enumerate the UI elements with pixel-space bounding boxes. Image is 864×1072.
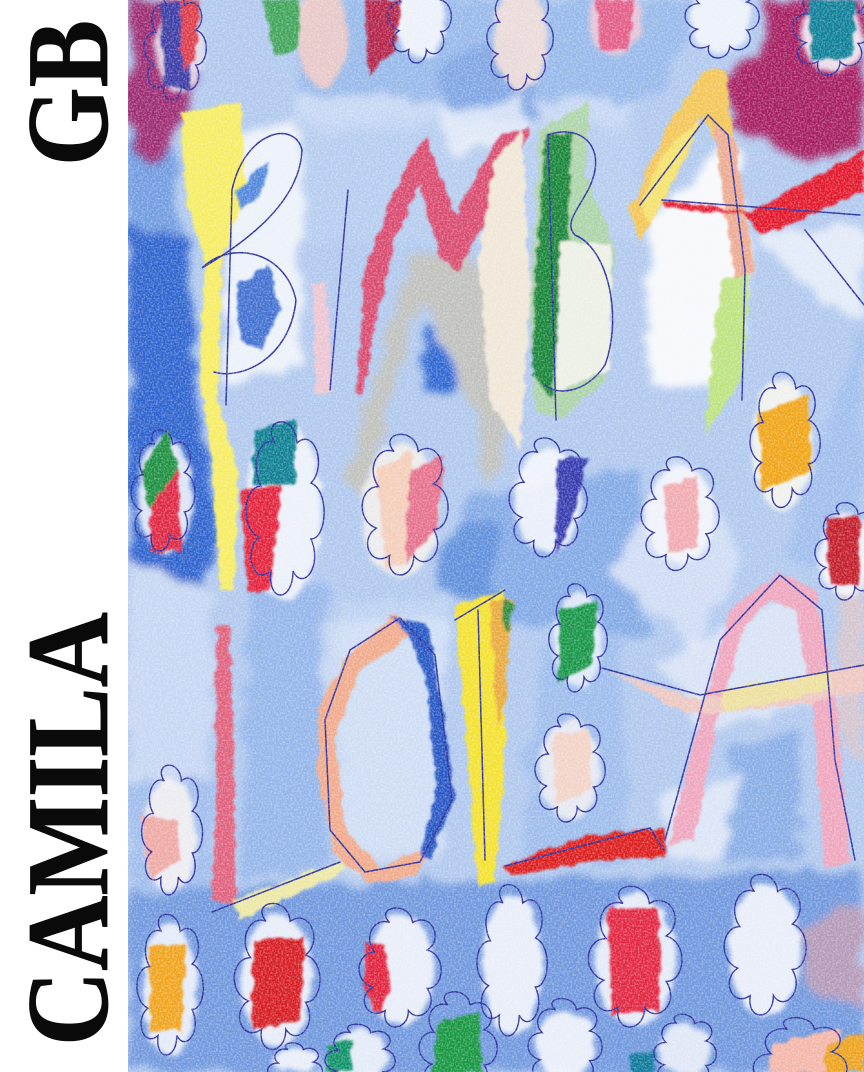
- letter I outline: [330, 190, 348, 390]
- vertical name: GB: GB: [4, 20, 133, 166]
- letter O: [315, 612, 428, 885]
- A strokes: [630, 70, 755, 280]
- thin pink strokes: [312, 280, 332, 395]
- lower A outline: [602, 575, 864, 860]
- blue pencil lettering: [202, 115, 864, 912]
- top-left magenta blot: [128, 0, 195, 165]
- letter L: [212, 625, 236, 905]
- red stroke: [502, 828, 665, 876]
- lower L and I outline: [212, 590, 664, 912]
- white paper patches: [225, 100, 864, 870]
- M, right leg: [478, 130, 530, 450]
- top-right magenta blot: [726, 0, 864, 158]
- left white margin: [0, 0, 128, 1072]
- magenta blots: [128, 0, 864, 165]
- letter M: [356, 128, 530, 395]
- red line of the A: [662, 150, 864, 235]
- green B outline: [545, 132, 613, 420]
- yellow I: [455, 590, 505, 885]
- A outline: [640, 115, 864, 400]
- yellow vertical stroke: [182, 104, 246, 590]
- pink A: [668, 572, 850, 870]
- lower O outline: [325, 618, 452, 872]
- blue fillings of the B: [235, 160, 280, 350]
- big yellow stroke and lettering in crayon: [182, 70, 864, 920]
- vertical name: CAMILA: CAMILA: [4, 612, 133, 1046]
- green B: [530, 100, 615, 420]
- letter B outline: [202, 134, 302, 405]
- grey wash under the M: [345, 250, 505, 500]
